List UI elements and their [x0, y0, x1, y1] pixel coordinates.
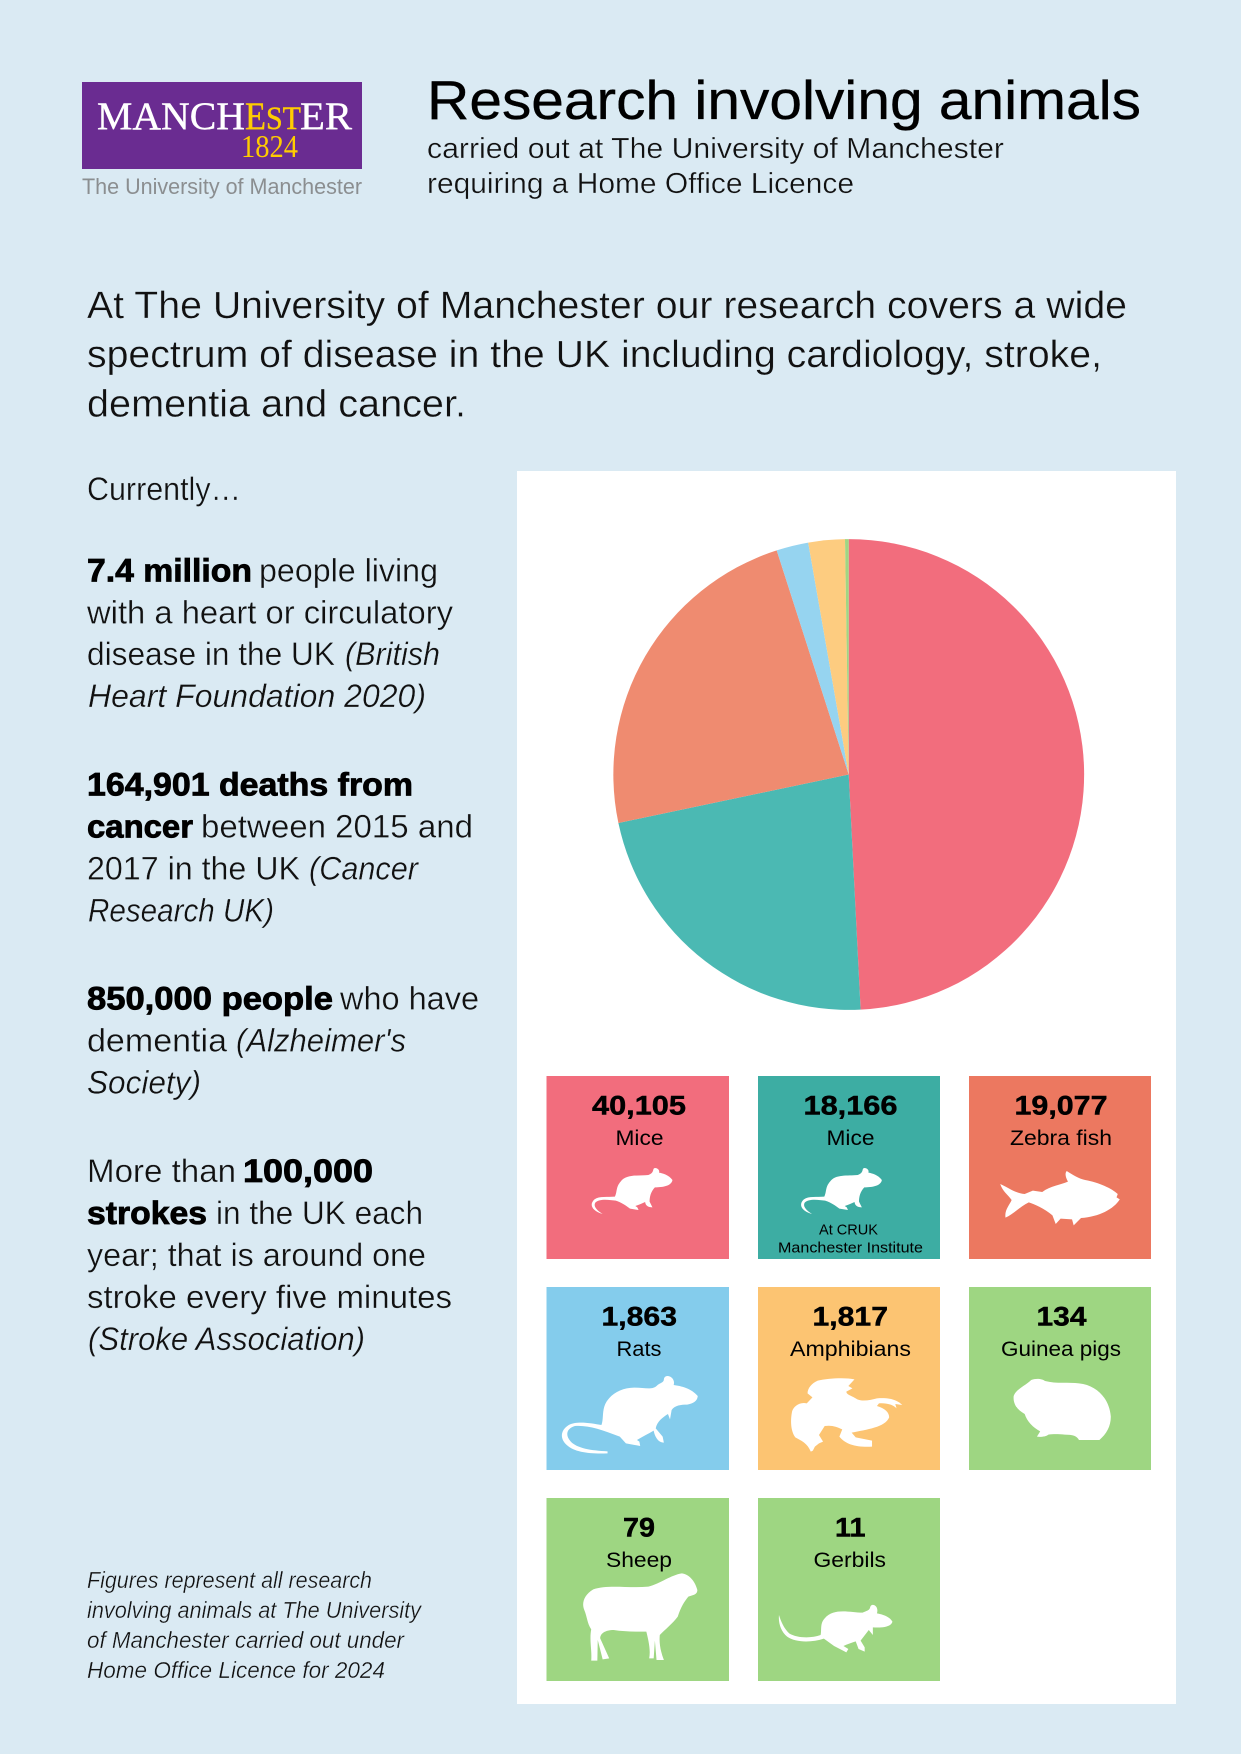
stat: dementia: (Alzheimer's: [236, 1022, 406, 1058]
tile: amphibians: [758, 1287, 940, 1470]
icon: fish: [1000, 1171, 1120, 1225]
stat: dementia: 850,000 people: [87, 980, 333, 1016]
icon: gerbil: [779, 1605, 892, 1652]
stat: dementia: who have: [339, 980, 479, 1016]
tile: amphibians: Amphibians: [790, 1337, 911, 1361]
stat: heart disease: people living: [259, 552, 438, 588]
icon: mouse: [801, 1168, 882, 1214]
tile: mice 18,166 at CRUK: At CRUK: [819, 1222, 878, 1238]
intro paragraph: [87, 285, 1127, 426]
tile: rats: [546, 1287, 729, 1470]
tile: gerbils: [758, 1498, 940, 1681]
logo: University of Manchester: ER: [300, 95, 352, 138]
tile: rats: 1,863: [602, 1302, 677, 1332]
subtitle: carried out at The University of Manchester: [427, 133, 1004, 165]
stat: dementia: dementia: [87, 1022, 227, 1058]
stat: strokes: More than: [87, 1153, 236, 1189]
icon: sheep: [583, 1573, 697, 1661]
stat: heart disease: [86, 552, 453, 714]
tile: zebra fish: [969, 1076, 1151, 1259]
stat: cancer deaths: cancer: [87, 808, 193, 844]
stat: heart disease: 7.4 million: [87, 552, 252, 588]
stat: strokes: year; that is around one: [87, 1237, 426, 1273]
stat: strokes: stroke every five minutes: [87, 1279, 452, 1315]
stat: heart disease: (British: [345, 636, 440, 672]
tile: mice 18,166 at CRUK: Manchester Institute: [778, 1240, 923, 1256]
logo: University of Manchester: [82, 82, 362, 199]
tile: guinea pigs: [969, 1287, 1151, 1470]
stat: cancer deaths: 2017 in the UK: [87, 850, 300, 886]
tile: mice 40,105: 40,105: [592, 1090, 686, 1120]
stat: strokes: (Stroke Association): [88, 1321, 365, 1357]
stat: heart disease: Heart Foundation 2020): [88, 678, 426, 714]
logo: University of Manchester: E: [245, 95, 266, 138]
footnote: Home Office Licence for 2024: [87, 1657, 385, 1683]
tile: guinea pigs: 134: [1036, 1302, 1086, 1332]
stat: heart disease: disease in the UK: [87, 636, 335, 672]
stat: cancer deaths: [87, 766, 473, 928]
stat: strokes: [87, 1153, 452, 1357]
tile: mice 18,166 at CRUK: [758, 1076, 940, 1259]
tile: zebra fish: 19,077: [1014, 1090, 1108, 1120]
footnote: of Manchester carried out under: [87, 1627, 405, 1653]
stat: strokes: 100,000: [243, 1153, 373, 1189]
subtitle: [427, 133, 1004, 200]
logo: University of Manchester: 1824: [241, 128, 298, 164]
tile: sheep: 79: [623, 1512, 655, 1542]
icon: rat: [562, 1376, 698, 1453]
logo: University of Manchester: ST: [266, 101, 301, 137]
tile: rats: Rats: [616, 1337, 662, 1361]
stat: dementia: Society): [87, 1064, 201, 1100]
icon: mouse: [592, 1168, 672, 1214]
pie chart: [613, 539, 1084, 1010]
tile: gerbils: Gerbils: [814, 1548, 886, 1572]
stat: dementia: [87, 980, 479, 1100]
title: Research involving animals: [427, 69, 1141, 131]
tile: mice 40,105: [546, 1076, 729, 1259]
tile: zebra fish: Zebra fish: [1010, 1126, 1112, 1150]
tile: amphibians: 1,817: [812, 1302, 888, 1332]
logo: University of Manchester: The University of Manchester: [82, 174, 362, 199]
subtitle: requiring a Home Office Licence: [427, 168, 854, 200]
stat: strokes: strokes: [87, 1195, 207, 1231]
footnote: Figures represent all research: [87, 1567, 372, 1593]
intro paragraph: dementia and cancer.: [87, 384, 466, 426]
intro paragraph: At The University of Manchester our research covers a wide: [87, 285, 1127, 327]
stat: cancer deaths: between 2015 and: [201, 808, 473, 844]
footnote: involving animals at The University: [87, 1597, 422, 1623]
tile: guinea pigs: Guinea pigs: [1001, 1337, 1121, 1361]
tile: mice 40,105: Mice: [616, 1126, 664, 1150]
text: currently: Currently…: [87, 471, 241, 507]
icon: guinea pig: [1014, 1379, 1111, 1440]
tile: mice 18,166 at CRUK: Mice: [826, 1126, 874, 1150]
stat: cancer deaths: (Cancer: [309, 850, 419, 886]
footnote: [87, 1567, 422, 1683]
logo: University of Manchester: MANCH: [97, 95, 245, 138]
stat: cancer deaths: 164,901 deaths from: [87, 766, 413, 802]
panel: chart and animal counts: [517, 471, 1176, 1704]
stat: heart disease: with a heart or circulatory: [86, 594, 453, 630]
tile: gerbils: 11: [835, 1512, 866, 1542]
tile: mice 18,166 at CRUK: 18,166: [804, 1090, 898, 1120]
icon: frog: [791, 1378, 902, 1452]
tile: sheep: [546, 1498, 729, 1681]
intro paragraph: spectrum of disease in the UK including cardiology, stroke,: [87, 334, 1102, 376]
tile: sheep: Sheep: [606, 1548, 672, 1572]
stat: cancer deaths: Research UK): [88, 892, 274, 928]
stat: strokes: in the UK each: [216, 1195, 423, 1231]
